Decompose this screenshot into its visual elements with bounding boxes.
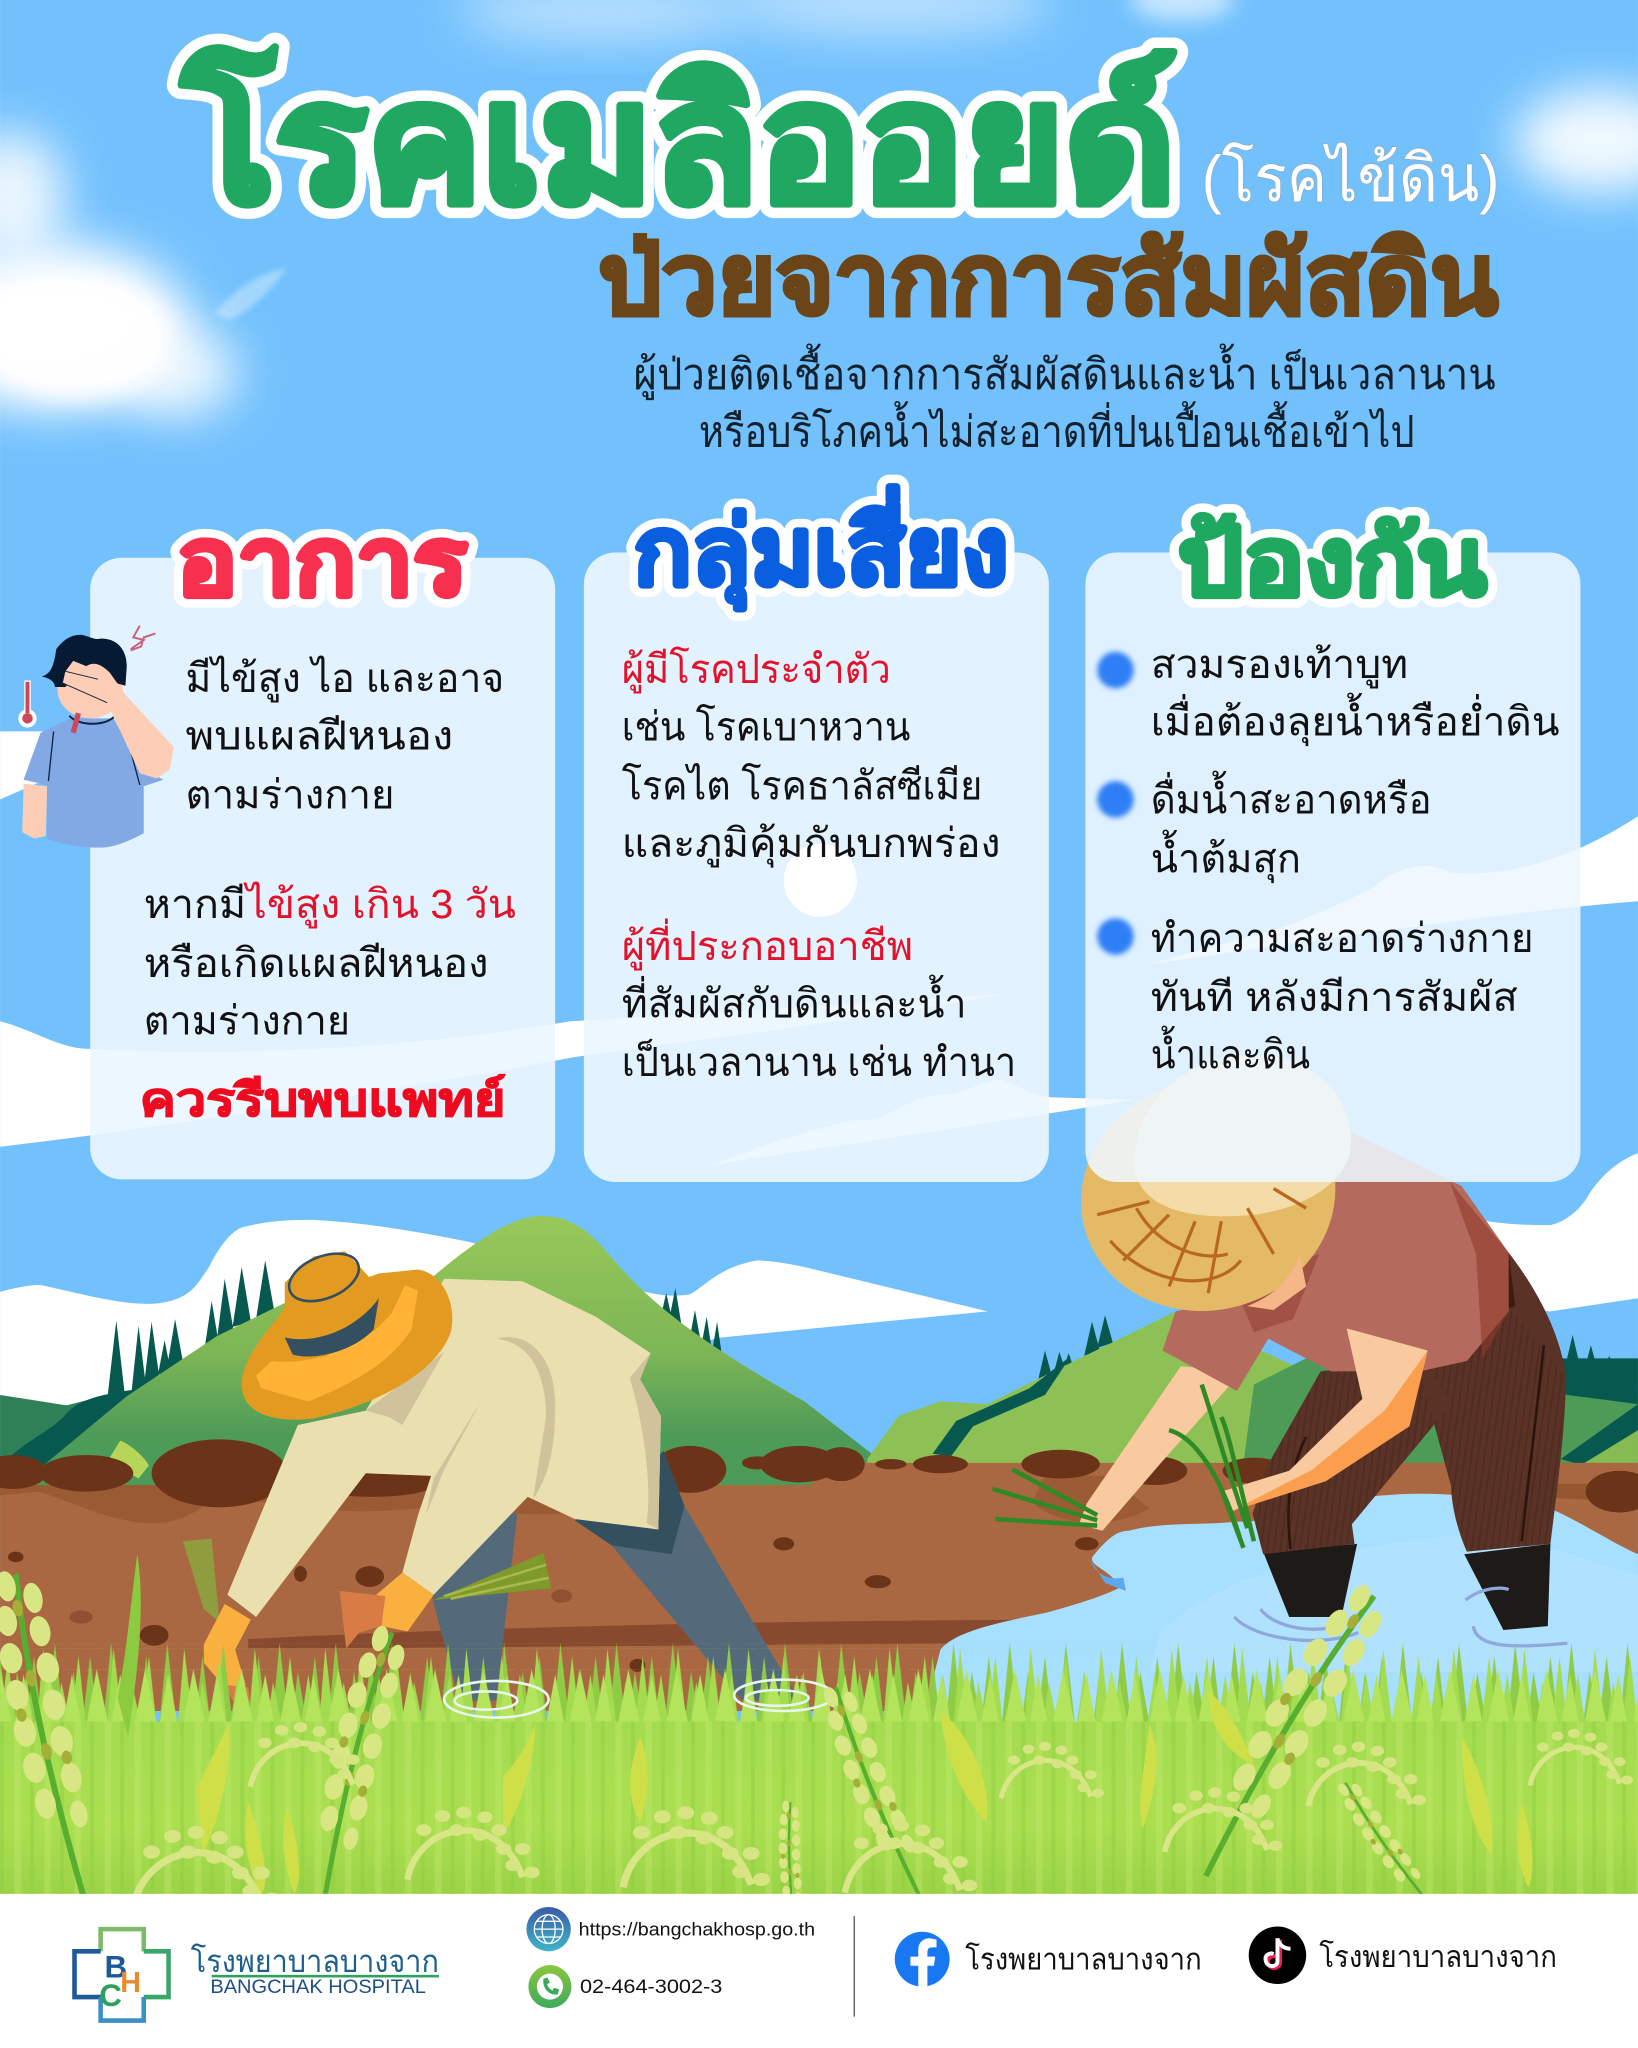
bullet dots [1097,652,1134,955]
rice arch 5 [1001,1742,1104,1799]
icon: globe [526,1907,571,1951]
phone number: 02-464-3002-3 [580,1976,722,1998]
rice stalks [0,1564,1633,1933]
facebook name: โรงพยาบาลบางจาก [965,1942,1202,1977]
soil bank with rocks [0,1439,1638,1711]
description line 2: หรือบริโภคน้ำไม่สะอาดที่ปนเปื้อนเชื้อเข้าไป [699,401,1415,457]
text block: prevention: ดื่มน้ำสะอาดหรือ [1151,771,1432,823]
rice panicle: centre [812,1678,939,1915]
text block: risk groups [622,646,1016,1085]
rice arch 1 [133,1826,280,1907]
clouds: blurred sky clouds [0,0,1638,419]
panel: risk groups [584,552,1049,1182]
heading: risk groups: กลุ่มเสี่ยง [634,485,1008,610]
rice arch 6 [1308,1742,1426,1806]
rice panicle: right lower [1331,1775,1444,1920]
icon: hospital logo [75,1929,169,2021]
text block: symptoms: ควรรีบพบแพทย์ [140,1074,506,1125]
text block: prevention: ทันที หลังมีการสัมผัส [1151,974,1518,1020]
rice panicle: lower centre [777,1800,804,1933]
icon: sick person with fever [18,626,174,848]
icon: hospital logo: B [105,1949,127,1984]
left farmer: shirt shading [366,1337,661,1529]
heading: prevention: ป้องกัน [1178,509,1486,614]
right farmer: shirt folds [1234,1182,1509,1358]
text block: prevention: ทำความสะอาดร่างกาย [1151,915,1533,961]
water ripples around left farmer's feet [444,1680,833,1718]
left farmer: trousers [423,1451,799,1701]
subtitle: ป่วยจากการสัมผัสดิน [598,224,1498,335]
panel: prevention [1085,552,1580,1182]
heading: symptoms: อาการ [176,509,468,614]
text block: prevention: เมื่อต้องลุยน้ำหรือย่ำดิน [1151,692,1560,746]
icon: phone [528,1965,571,2008]
rice arch 9 [1165,1787,1282,1852]
text block: prevention: น้ำต้มสุก [1151,829,1301,883]
heading: symptoms: อาการ [176,509,468,614]
text block: symptoms: ตามร่างกาย [186,771,395,817]
left farmer: gloved hands [204,1573,434,1706]
rice arch 2 [407,1807,540,1880]
text block: risk groups: เช่น โรคเบาหวาน [622,704,910,750]
water pond [914,1494,1638,1750]
rice arch 4 [250,1722,368,1787]
title: parenthetical: (โรคไข้ดิน) [1202,142,1499,215]
website: https://bangchakhosp.go.th [579,1919,815,1940]
title [181,47,1499,457]
text block: symptoms: มีไข้สูง ไอ และอาจ [186,655,504,703]
text block: symptoms: หรือเกิดแผลฝีหนอง [144,940,489,986]
right farmer: front arm [1221,1328,1428,1511]
right farmer: seedlings [993,1384,1254,1548]
text block: risk groups: ที่สัมผัสกับดินและน้ำ [622,974,967,1026]
text block: symptoms: หากมีไข้สูง เกิน 3 วัน [144,881,516,929]
text block: prevention: สวมรองเท้าบูท [1151,641,1408,689]
rice arch 7 [1530,1729,1633,1785]
text block: risk groups: และภูมิคุ้มกันบกพร่อง [622,820,1001,868]
icon: facebook [895,1932,950,1987]
rice panicle: right of centre [1177,1575,1396,1887]
text block: risk groups: เป็นเวลานาน เช่น ทำนา [622,1038,1016,1085]
right farmer: arm at back [1079,1366,1242,1531]
divider [854,1916,855,2017]
icon: tiktok [1249,1927,1306,1984]
decorative moon dot in risk panel [784,844,857,917]
right farmer: boot ripples [1234,1588,1567,1646]
title: main heading: โรคเมลิออยด์ [181,47,1176,237]
hospital english name: BANGCHAK HOSPITAL [210,1976,426,1998]
icon: hospital logo: C [99,1978,122,2013]
hills: back-left and right hills, pines [0,1216,1638,1489]
text block: risk groups: ผู้ที่ประกอบอาชีพ [622,918,913,971]
right farmer: boots [1263,1544,1550,1630]
text block: risk groups: ผู้มีโรคประจำตัว [622,646,891,694]
right farmer [993,1051,1567,1646]
left farmer [183,1244,799,1706]
rice panicle: centre left [294,1621,412,1916]
grass field [0,1554,1638,1894]
text block: prevention [1097,641,1560,1077]
description line 1: ผู้ป่วยติดเชื้อจากการสัมผัสดินและน้ำ เป็นเวลานาน [634,343,1496,401]
rice arch 3 [623,1806,770,1887]
hospital name: โรงพยาบาลบางจาก [191,1943,439,1979]
text block: symptoms: พบแผลฝีหนอง [186,713,453,759]
right farmer: trousers [1253,1253,1566,1554]
logo underline [212,1975,439,1977]
white ribbon clouds behind the panels [0,731,1638,1411]
heading: prevention: ป้องกัน [1178,509,1486,614]
left farmer: shirt [227,1279,661,1617]
text block: risk groups: โรคไต โรคธาลัสซีเมีย [622,762,982,808]
right farmer: straw hat [1055,1051,1362,1339]
rice panicle: far left [0,1564,109,1913]
heading: risk groups: กลุ่มเสี่ยง [634,485,1008,610]
panel: symptoms [90,558,555,1179]
footer [0,1894,1638,2048]
text block: symptoms: ตามร่างกาย [144,997,350,1043]
icon: hospital logo: H [120,1967,141,1999]
right farmer: shirt [1163,1132,1509,1391]
tiktok name: โรงพยาบาลบางจาก [1319,1939,1557,1974]
left farmer: hat [242,1244,452,1420]
text block: prevention: น้ำและดิน [1151,1025,1310,1077]
left farmer: seedling bundles [183,1539,551,1622]
rice arch 8 [845,1820,977,1893]
title: main heading outline: โรคเมลิออยด์ [181,47,1176,237]
text block: symptoms [140,655,516,1125]
right farmer: neck [1247,1254,1306,1310]
